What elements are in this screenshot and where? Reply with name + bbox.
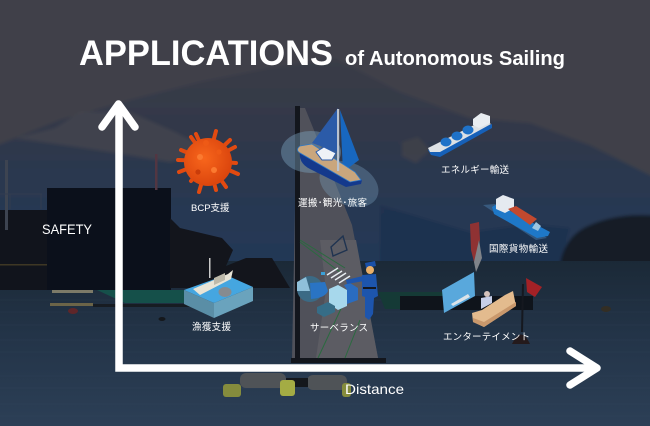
icon: container ship	[483, 195, 550, 240]
axes arrows	[102, 104, 597, 385]
icon: surveillance blocks and officer	[297, 261, 378, 320]
icon: passenger yacht with halo	[281, 108, 386, 216]
label: surveillance: サーベランス	[310, 323, 368, 334]
label: fishing support: 漁獲支援	[192, 321, 231, 333]
police officer	[346, 261, 378, 320]
fish farm rafts	[50, 290, 533, 321]
title: APPLICATIONS	[79, 34, 333, 73]
icon: fishing boat on water block	[184, 258, 253, 318]
y axis label: SAFETY	[42, 221, 93, 237]
subtitle: of Autonomous Sailing	[345, 48, 565, 70]
label: BCP support: BCP支援	[191, 202, 230, 214]
label: international cargo: 国際貨物輸送	[489, 243, 548, 255]
trimaran floats	[223, 373, 351, 397]
label: entertainment: エンターテイメント	[443, 332, 530, 343]
windsurfer and buoy	[470, 222, 611, 344]
label: energy transport: エネルギー輸送	[441, 164, 509, 176]
breakwater	[0, 154, 290, 290]
icon: virus	[178, 131, 238, 192]
icon: entertainment screen and sofa	[442, 272, 516, 327]
sailboat mast and sail	[223, 106, 386, 397]
icon: energy tanker	[428, 113, 492, 157]
label: transport tourism passengers: 運搬･観光･旅客	[298, 197, 367, 209]
x axis label: Distance	[345, 381, 404, 397]
